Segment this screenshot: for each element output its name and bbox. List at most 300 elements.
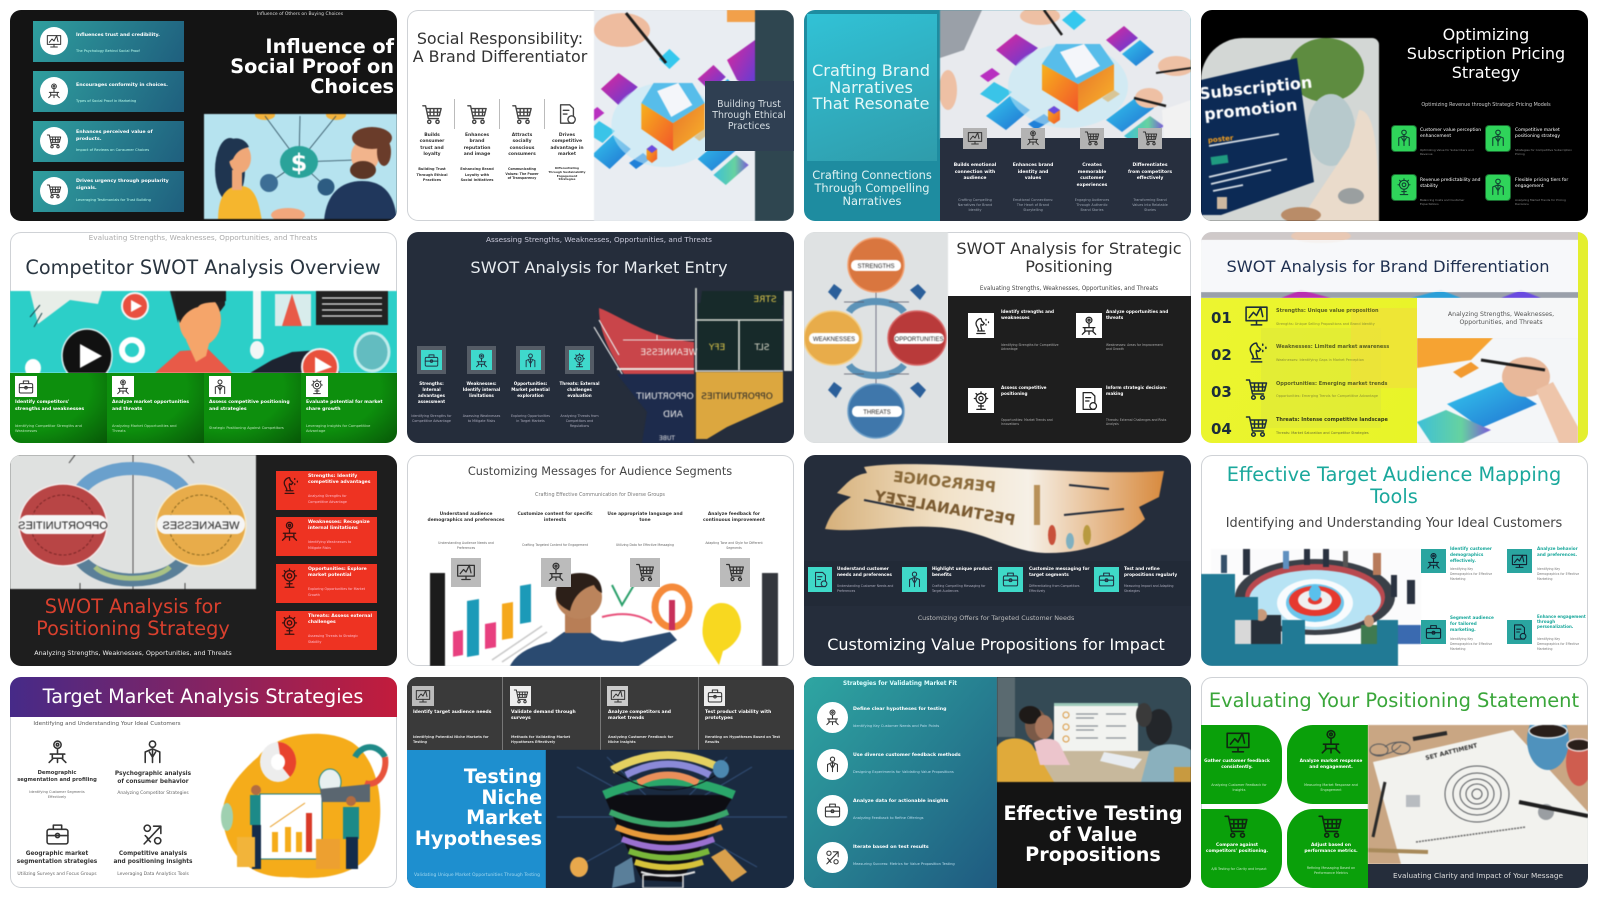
sub text: Innovations: [1001, 422, 1019, 426]
sub text: A/B Testing for Clarity and Impact: [1211, 867, 1267, 871]
icon: gear hand: [1244, 340, 1269, 365]
callout text: [712, 99, 786, 132]
point text: challenges: [308, 620, 336, 625]
card: feedback: [1201, 725, 1282, 804]
point text: Psychographic analysis: [115, 771, 191, 777]
point text: values: [1025, 176, 1041, 181]
icon: target: [467, 346, 496, 374]
column: brand identity: [1013, 128, 1053, 212]
callout text: Through Ethical: [712, 110, 786, 121]
point text: [1206, 843, 1268, 855]
title: Testing: [464, 765, 542, 788]
sub text: Leveraging Data Analytics Tools: [117, 872, 189, 877]
sub text: [416, 167, 448, 182]
title: [1227, 464, 1561, 508]
sub text: Effectively: [1029, 589, 1045, 593]
point text: Builds emotional: [954, 163, 996, 168]
title: Customizing Messages for Audience Segments: [468, 465, 732, 478]
card: trust and credibility: [33, 21, 184, 62]
point text: advantage in: [550, 146, 584, 151]
point text: Enhances brand: [1013, 163, 1053, 168]
sub text: Identifying Key Customer Needs and Pain Points: [853, 724, 939, 728]
image: subscription promotion screen: Subscription: [1201, 73, 1313, 103]
point text: Analyze behavior: [1537, 546, 1578, 551]
point text: Weaknesses: Recognize: [308, 520, 370, 525]
sub text: Through Authentic: [1076, 203, 1108, 207]
point text: through: [1537, 619, 1555, 624]
point text: [308, 614, 372, 627]
point text: [76, 130, 153, 142]
column: feedback: [689, 511, 779, 587]
point text: [837, 567, 892, 580]
sub text: Measuring Market Response and: [1304, 783, 1358, 787]
sub text: The Heart of Brand: [1017, 203, 1049, 207]
image: torn banner: [804, 455, 1191, 560]
diagram: SWOT circles: OPPORTUNITIES: [895, 337, 943, 343]
icon: monitor: [1225, 728, 1251, 756]
sub text: Engaging Audiences: [1075, 198, 1109, 202]
point text: [306, 400, 383, 413]
sub text: Identifying Key: [1537, 567, 1560, 571]
point text: Assess competitive: [1001, 385, 1047, 390]
sub text: Through Sustainability: [548, 170, 586, 174]
subtitle: Optimizing Revenue through Strategic Pricing Models: [1421, 102, 1551, 108]
item: needs: [808, 567, 900, 599]
sub text: Threats: [112, 429, 126, 433]
illustration: funnel: [546, 750, 794, 888]
point text: Strengths: Unique value proposition: [1276, 308, 1379, 314]
sub text: Mitigate Risks: [308, 546, 331, 550]
item: feedback: [817, 749, 992, 781]
sub text: Strategies: [1124, 589, 1140, 593]
caption: Evaluating Strengths, Weaknesses, Opportunities, and Threats: [89, 233, 317, 242]
sub text: [413, 735, 489, 745]
subtitle: Analyzing Strengths, Weaknesses, Opportunities, and Threats: [34, 649, 232, 657]
sub text: Demographics for Effective: [1537, 572, 1579, 576]
icon: monitor: [40, 27, 68, 55]
point text: [464, 132, 490, 157]
title: [36, 596, 230, 640]
sub text: Engagement: [557, 174, 577, 178]
panel: strategies column: [804, 677, 997, 888]
title: Social Proof on: [230, 55, 394, 78]
sub text: Identifying Strengths for Competitive: [1001, 343, 1058, 347]
point text: effectively.: [1450, 558, 1476, 563]
sub text: Exploring Opportunities: [511, 414, 550, 418]
sub text: Opportunities: Market Trends and: [1001, 418, 1053, 422]
icon: cart: [422, 105, 442, 124]
sub text: and Growth: [1106, 347, 1124, 351]
sub text: Analyzing Strengths for: [308, 494, 347, 498]
icon: gear: [968, 388, 994, 413]
point text: Builds: [424, 133, 440, 138]
sub text: Threats: External Challenges and Risks: [1106, 418, 1166, 422]
sub text: Strategies for Competitive Subscription: [1515, 148, 1572, 152]
point text: demographics: [1450, 552, 1483, 557]
sub text: Stability: [308, 640, 322, 644]
sub text: Methods for Validating Market: [511, 735, 570, 739]
card: threat: [276, 611, 377, 650]
title: Positioning: [1025, 257, 1113, 276]
sub text: [411, 414, 452, 424]
sub text: Opportunities: Emerging Trends for Competitive Advantage: [1276, 394, 1378, 398]
caption: Customizing Offers for Targeted Customer Needs: [918, 614, 1074, 622]
point text: personalization.: [1537, 624, 1573, 629]
diagram: SWOT circles: STRENGTHS: [857, 264, 895, 270]
panel: points: [948, 296, 1191, 443]
icon: basket: [512, 105, 532, 124]
point text: [607, 512, 683, 525]
icon: gear: [306, 376, 328, 397]
point text: [1420, 178, 1480, 190]
sub text: [705, 735, 780, 745]
number: 03: [1211, 383, 1232, 401]
item: competitive: [110, 822, 195, 882]
sub text: Strategies: [559, 177, 575, 181]
title: [1407, 25, 1565, 82]
point text: consumers: [508, 152, 536, 157]
icon: cart: [1244, 414, 1269, 438]
sub text: Narratives for Brand: [958, 203, 992, 207]
illustration: torn SWOT matrix: OPPORTUNITIES: [701, 392, 773, 402]
sub text: Balancing Costs and Customer: [1420, 198, 1464, 202]
point text: Segment audience: [1450, 615, 1494, 620]
panel: Customizing Messages: [407, 455, 794, 666]
sub text: Identifying Weaknesses to: [308, 540, 351, 544]
image: subscription promotion screen: promotion: [1203, 95, 1298, 124]
sub text: Identifying Potential Niche Markets for: [413, 735, 489, 739]
sub text: Designing Experiments for Validating Value Propositions: [853, 770, 954, 774]
sub text: Competitors and: [566, 419, 593, 423]
icon: briefcase: [15, 376, 37, 397]
card: competitors: [1201, 809, 1282, 888]
point text: [76, 178, 169, 191]
point text: Demographic: [38, 770, 76, 776]
icon tile: [1421, 549, 1446, 573]
column: competitive advantage: [548, 104, 586, 181]
point text: effectively: [1137, 176, 1163, 181]
point text: continuous improvement: [703, 518, 765, 523]
point text: weaknesses: [1001, 315, 1029, 320]
caption: Validating Unique Market Opportunities Through Testing: [414, 873, 540, 878]
point text: making: [1106, 391, 1123, 396]
subtitle: Crafting Effective Communication for Diverse Groups: [535, 492, 665, 498]
sub text: Assessing Threats to Strategic: [308, 634, 358, 638]
point text: Analyze market opportunities: [112, 400, 189, 405]
sub text: Regulations: [570, 424, 589, 428]
sub text: [608, 735, 673, 745]
point text: [1450, 615, 1494, 633]
illustration: torn SWOT matrix: SLT: [754, 343, 770, 353]
point text: assessment: [418, 399, 445, 404]
sub text: Marketing: [1450, 577, 1465, 581]
diagram: mirrored SWOT circles: OPPORTUNITIES: [18, 520, 108, 532]
title: Social Responsibility:: [417, 29, 583, 48]
number: 01: [1211, 309, 1232, 327]
sub text: Values into Relatable: [1132, 203, 1168, 207]
point text: experiences: [1077, 182, 1107, 188]
item: demographics: [1421, 549, 1505, 587]
point text: Identify strengths and: [1001, 309, 1054, 314]
point text: from competitors: [1128, 170, 1172, 174]
point text: [1515, 128, 1560, 140]
point text: demographics and preferences: [428, 518, 504, 523]
icon tile: [808, 567, 832, 592]
icon: cart: [467, 105, 487, 124]
icon: [607, 686, 628, 706]
point text: Threats: Intense competitive landscape: [1276, 417, 1388, 423]
point text: Flexible pricing tiers for: [1515, 178, 1568, 183]
subtitle: Narratives: [843, 194, 901, 208]
sub text: [511, 414, 550, 424]
point text: Weaknesses: Limited market awareness: [1276, 344, 1389, 350]
point text: [705, 710, 771, 723]
card: opportunity: [276, 564, 377, 603]
column: emotional connection: [954, 128, 996, 212]
subtitle: Evaluating Strengths, Weaknesses, Opportunities, and Threats: [980, 286, 1158, 292]
icon: person: [140, 739, 165, 765]
illustration: torn SWOT matrix: [592, 287, 794, 443]
column: prototypes: [699, 677, 794, 750]
title: SWOT Analysis for Brand Differentiation: [1226, 257, 1550, 276]
icon: cart: [1222, 813, 1250, 839]
point text: limitations: [469, 393, 494, 398]
point text: Inform strategic decision-: [1106, 385, 1167, 390]
sub text: Segments: [726, 546, 742, 550]
point text: Creates: [1082, 163, 1102, 168]
sub text: [1537, 637, 1579, 653]
illustration: target with audience: [1201, 549, 1422, 666]
point text: Differentiates: [1132, 163, 1168, 168]
sub text: [112, 424, 177, 434]
sub text: Refining Messaging Based on: [1307, 866, 1355, 870]
point text: Test and refine: [1124, 567, 1160, 572]
column: conscious consumers: [505, 105, 539, 180]
point text: Internal: [422, 387, 441, 392]
title: [415, 767, 542, 849]
panel: SWOT Market Entry: [407, 232, 794, 443]
diagram: mirrored SWOT circles: WEAKNESSES: [162, 520, 240, 532]
point text: Opportunities: Explore: [308, 567, 367, 572]
sub text: [308, 586, 365, 598]
point text: segmentation and profiling: [17, 776, 97, 782]
sub text: [1420, 148, 1474, 157]
point text: Use diverse customer feedback methods: [853, 753, 961, 758]
sub text: Understanding Audience Needs and: [438, 541, 494, 545]
point text: [428, 512, 504, 525]
sub text: Weaknesses: Identifying Gaps in Market Perception: [1276, 358, 1364, 362]
point text: needs and preferences: [837, 573, 892, 578]
point text: Highlight unique product: [932, 567, 992, 572]
sub text: Storytelling: [1023, 208, 1043, 212]
icon: target: [1021, 128, 1045, 149]
icon tile: [1392, 175, 1416, 200]
point text: positioning: [1001, 391, 1028, 396]
column: weaknesses: [457, 346, 506, 431]
caption: Evaluating Clarity and Impact of Your Message: [1393, 871, 1563, 880]
callout: Building Trust: [705, 81, 794, 151]
point text: identity and: [1018, 170, 1048, 174]
icon: cart: [1138, 128, 1162, 149]
subtitle: Identifying and Understanding Your Ideal Customers: [1226, 516, 1562, 531]
item: data: [817, 795, 992, 827]
point text: internal limitations: [308, 526, 358, 531]
illustration: two people and dollar: [203, 113, 397, 220]
sub text: Optimizing Value for Subscribers and: [1420, 148, 1474, 152]
left panel: heading block: [807, 14, 937, 161]
point text: [932, 567, 992, 580]
item: demographic: [15, 739, 100, 799]
point text: evaluation: [567, 393, 592, 398]
icon tile: [1392, 126, 1416, 151]
icon circle: [817, 749, 848, 780]
icon: cart: [1316, 813, 1344, 839]
sub text: Revenue: [1420, 152, 1433, 156]
point text: competitors' positioning.: [1206, 849, 1268, 854]
sub text: Measuring Success: Metrics for Value Proposition Testing: [853, 862, 955, 866]
point text: [112, 400, 189, 413]
illustration: tiles and hand background: [1201, 232, 1588, 443]
panel: SWOT Strategic Positioning: [804, 232, 1191, 443]
item: geographic: [15, 822, 100, 882]
sub text: Transforming Brand: [1133, 198, 1167, 202]
point text: [508, 132, 536, 157]
icon: phone: [279, 521, 300, 542]
sub text: [1304, 783, 1358, 793]
point text: benefits: [932, 573, 952, 578]
sub text: Types of Social Proof in Marketing: [76, 99, 136, 103]
point text: Validate demand through: [511, 710, 576, 715]
item: hypotheses: [817, 702, 992, 734]
item: revenue predictability: [1392, 175, 1484, 207]
point text: advantages: [418, 393, 445, 398]
point text: of consumer behavior: [117, 779, 189, 785]
icon: briefcase: [417, 346, 446, 374]
sub text: Analyzing Market Trends for Pricing: [1515, 198, 1566, 202]
point text: exploration: [517, 393, 544, 398]
sub text: Effectively: [48, 795, 66, 799]
sub text: Measuring Impact and Adapting: [1124, 584, 1173, 588]
sub text: [308, 539, 351, 551]
sub text: Identifying Customer Segments: [29, 790, 85, 794]
top strip: [407, 677, 794, 750]
image: subscription promotion screen: poster: [1208, 134, 1234, 145]
point text: positioning strategy: [1515, 134, 1560, 139]
point text: and preferences.: [1537, 552, 1577, 557]
caption: Influence of Others on Buying Choices: [257, 12, 343, 17]
point text: [1128, 162, 1172, 181]
sub text: Differentiating: [555, 166, 579, 170]
point text: [1001, 309, 1054, 322]
point text: competitive: [552, 139, 582, 144]
sub text: Emotional Connections:: [1013, 198, 1053, 202]
sub text: Strategic Positioning Against Competitors: [209, 426, 284, 430]
subtitle: [812, 168, 932, 208]
title: That Resonate: [813, 94, 929, 113]
card: response: [1287, 725, 1368, 804]
point text: [308, 520, 370, 533]
point text: memorable: [1078, 170, 1106, 174]
point text: [1204, 759, 1270, 771]
point text: [115, 770, 191, 786]
sub text: [1001, 343, 1058, 352]
point text: competitive advantages: [308, 480, 371, 485]
point text: [1001, 385, 1047, 398]
panel: Target Market Analysis: [10, 677, 397, 888]
point text: Attracts: [512, 133, 532, 138]
point text: Weaknesses:: [466, 381, 497, 386]
header band: [10, 677, 397, 717]
title: of Value: [1049, 822, 1137, 846]
title: Target Market Analysis Strategies: [43, 685, 363, 708]
item: messaging: [998, 567, 1092, 599]
subtitle: Crafting Connections: [812, 168, 932, 182]
point text: and image: [464, 152, 490, 157]
sub text: Identifying Key: [1537, 637, 1560, 641]
sub text: Utilizing Data for Effective Messaging: [616, 543, 674, 547]
point text: Identify internal: [463, 387, 500, 392]
point text: marketing.: [1450, 627, 1476, 632]
item: customer value: [1392, 126, 1484, 158]
point text: conscious: [510, 146, 534, 151]
title: [230, 35, 394, 98]
callout band: [1417, 298, 1578, 338]
sub text: [308, 633, 358, 645]
point text: Test product viability with: [705, 710, 771, 715]
point text: Drives urgency through popularity: [76, 179, 169, 184]
panel: dark points strip: [940, 138, 1191, 221]
title: Influence of: [265, 35, 394, 58]
illustration: two people and dollar: $: [291, 149, 307, 177]
illustration: man at data board: [430, 573, 778, 666]
icon: chess knight: [968, 313, 994, 338]
icon: person: [209, 376, 231, 397]
point text: Revenue predictability and: [1420, 178, 1480, 183]
diagram: SWOT circles: [804, 232, 948, 443]
point text: market trends: [608, 716, 644, 721]
number: 04: [1211, 420, 1232, 438]
icon: document: [1076, 388, 1102, 413]
panel: title block: [407, 750, 546, 888]
diagram: SWOT circles: WEAKNESSES: [813, 337, 855, 343]
sub text: [438, 541, 494, 552]
item: psychographic: [110, 739, 195, 799]
point text: prototypes: [705, 716, 733, 721]
point text: connection with: [955, 170, 995, 174]
item: behavior: [1507, 549, 1587, 587]
title: SWOT Analysis for: [45, 595, 221, 618]
point text: target segments: [1029, 573, 1069, 578]
illustration: torn SWOT matrix: STRE: [753, 295, 777, 305]
panel: numbered list: [1201, 298, 1417, 443]
sub text: [1075, 198, 1110, 212]
sub text: Marketing: [1450, 647, 1465, 651]
card: urgency: [33, 171, 184, 212]
point text: [1106, 309, 1168, 322]
sub text: Expectations: [1420, 202, 1439, 206]
point text: [15, 400, 84, 413]
panel: Social Responsibility: [407, 10, 794, 221]
column: strengths: [407, 346, 456, 431]
point text: Enhances perceived value of: [76, 130, 153, 135]
point text: Gather customer feedback: [1204, 759, 1270, 764]
column: differentiates: [1128, 128, 1172, 212]
point text: Enhances: [465, 133, 489, 138]
sub text: [505, 167, 539, 180]
sub text: Identifying Key: [1450, 637, 1473, 641]
point text: Competitive market: [1515, 128, 1560, 133]
illustration: team at chart: [210, 727, 390, 885]
